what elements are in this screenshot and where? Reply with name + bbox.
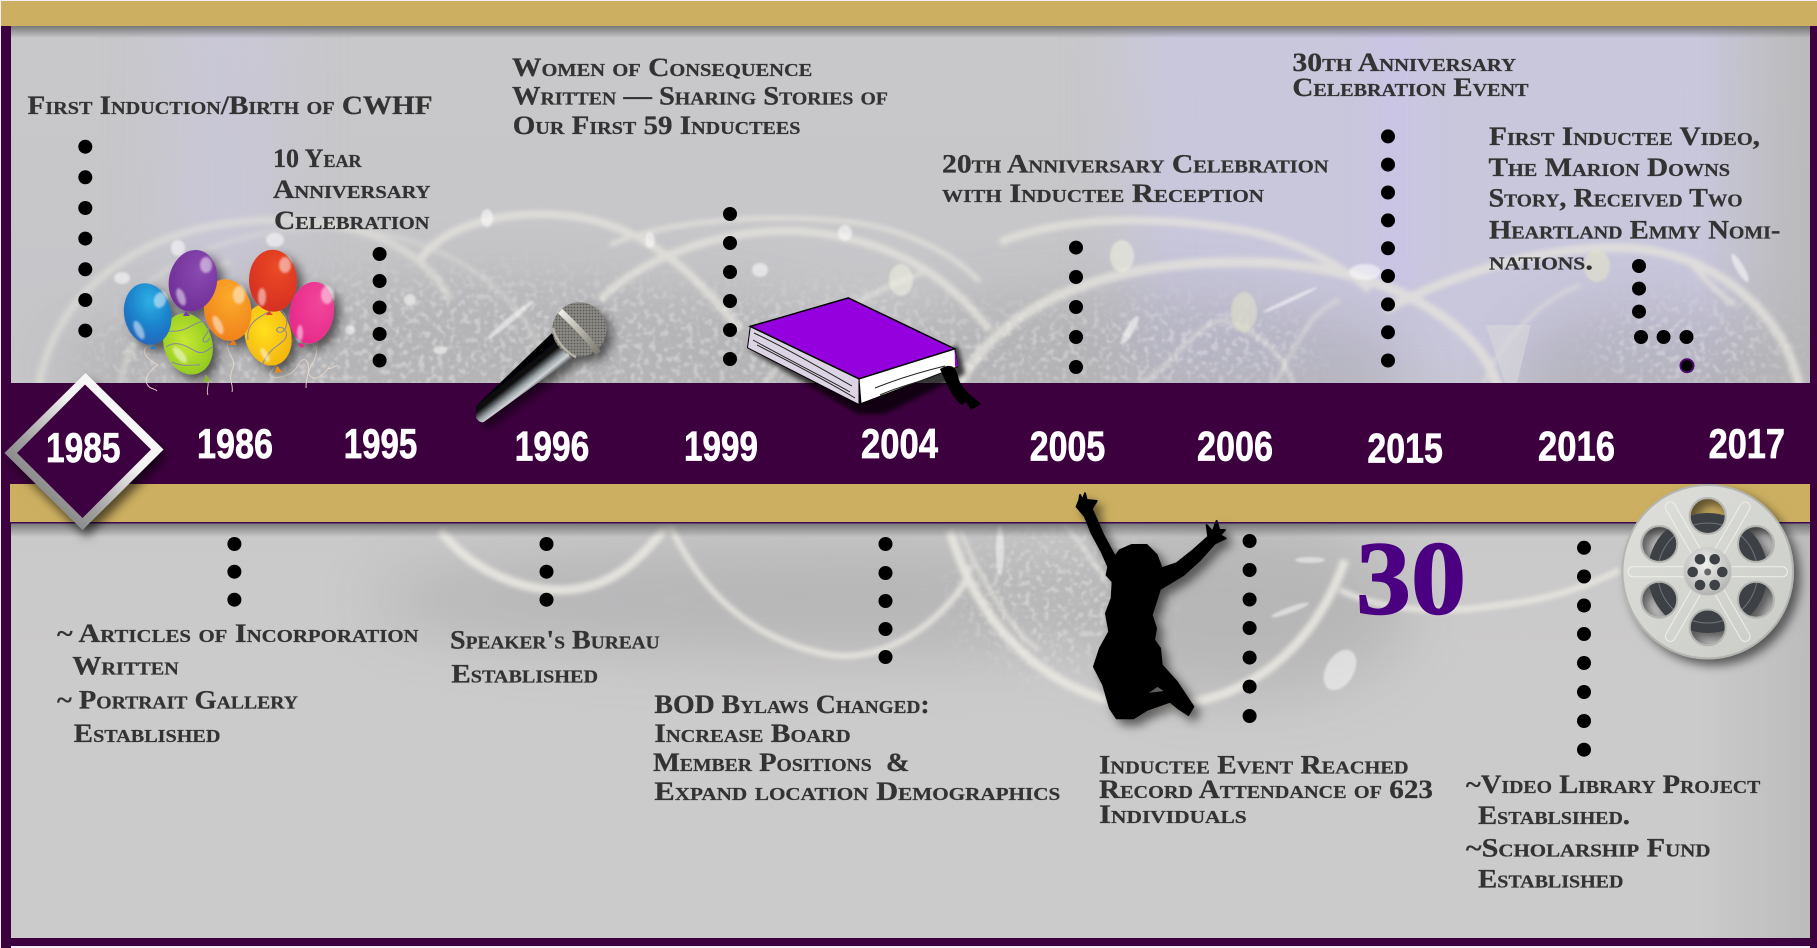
text: 1995 event: 10 Year bbox=[273, 144, 363, 173]
text: 2006 event: Inductee Event Reached bbox=[1099, 750, 1409, 779]
gold lower bar bbox=[10, 484, 1810, 524]
dotted connector 2004 bbox=[878, 537, 892, 664]
text: 1999 event bbox=[512, 53, 888, 140]
text: 2006 event: Record Attendance of 623 bbox=[1099, 775, 1433, 804]
dotted connector 1986 bbox=[227, 537, 241, 607]
text: 1999 event: Written — Sharing Stories of bbox=[512, 82, 888, 111]
year labels: 2005 bbox=[1030, 423, 1105, 470]
year labels: 1996 bbox=[515, 422, 589, 469]
text: 2005 event: 20th Anniversary Celebration bbox=[942, 150, 1329, 178]
text: 2016 events bbox=[1466, 770, 1760, 893]
text: 1996 event: Speaker's Bureau bbox=[450, 626, 660, 655]
dotted connector 1985 bbox=[78, 140, 92, 338]
text: 2004 event bbox=[653, 690, 1060, 806]
text: 2006 event bbox=[1099, 750, 1433, 829]
text: 1986 events bbox=[57, 619, 419, 748]
text: 2016 events: ~Scholarship Fund bbox=[1466, 834, 1710, 863]
text: 2004 event: Increase Board bbox=[654, 719, 851, 748]
year labels: 1995 bbox=[344, 420, 417, 467]
1985 diamond marker bbox=[4, 373, 164, 530]
text: 1999 event: Our First 59 Inductees bbox=[513, 111, 800, 140]
text: 1995 event: Anniversary bbox=[273, 175, 430, 204]
text: 2005 event: with Inductee Reception bbox=[942, 179, 1264, 208]
text: 1999 event: Women of Consequence bbox=[512, 53, 812, 82]
text: 1996 event bbox=[450, 626, 660, 689]
year labels: 2004 bbox=[861, 420, 939, 467]
top gold bar bbox=[1, 1, 1817, 26]
year labels: 1986 bbox=[197, 420, 273, 467]
text: 2015 event: Celebration Event bbox=[1292, 73, 1528, 102]
text: 2004 event: Expand location Demographics bbox=[654, 777, 1060, 806]
text: 2004 event: Member Positions & bbox=[653, 748, 910, 777]
text: 2016 events: Established bbox=[1478, 864, 1623, 893]
text: 2015 event: 30th Anniversary bbox=[1292, 48, 1516, 77]
logo ghost bbox=[1486, 325, 1531, 383]
text: 2015 event bbox=[1292, 48, 1528, 102]
icon: film reel bbox=[1622, 485, 1793, 658]
text: 1996 event: Established bbox=[451, 660, 598, 689]
dotted connector 2005 bbox=[1069, 241, 1083, 374]
text: 2017 event: Story, Received Two bbox=[1488, 184, 1742, 213]
text: 2017 event: Heartland Emmy Nomi- bbox=[1489, 216, 1780, 245]
year labels: 2015 bbox=[1367, 424, 1443, 472]
crystal rings lower bbox=[440, 520, 1620, 706]
text: 1986 events: ~ Portrait Gallery bbox=[57, 686, 298, 715]
year labels bbox=[46, 420, 1785, 472]
icon: purple book bbox=[745, 298, 981, 414]
text: 2017 event: First Inductee Video, bbox=[1489, 122, 1760, 151]
text: 2006 event: Individuals bbox=[1099, 800, 1247, 829]
dotted connector 2006 bbox=[1243, 534, 1257, 723]
icon: microphone bbox=[476, 302, 606, 422]
text: 2017 event: The Marion Downs bbox=[1488, 153, 1730, 182]
dotted connector 1996 bbox=[540, 537, 554, 607]
dotted connector 2016 bbox=[1577, 541, 1591, 757]
year labels: 2017 bbox=[1709, 420, 1785, 467]
text: 1995 event bbox=[273, 144, 430, 235]
text: 2016 events: ~Video Library Project bbox=[1466, 770, 1760, 799]
text: 1995 event: Celebration bbox=[274, 206, 429, 235]
crystal rings upper bbox=[38, 209, 1800, 695]
icon: balloons bbox=[118, 245, 339, 395]
text: 2016 events: Establsihed. bbox=[1478, 801, 1630, 830]
dotted connector 2015 bbox=[1381, 129, 1395, 368]
text: 1985 event: First Induction/Birth of CWHF bbox=[28, 91, 432, 120]
year labels: 2016 bbox=[1538, 423, 1615, 470]
text: 2004 event: BOD Bylaws Changed: bbox=[654, 690, 930, 719]
text: 2005 event bbox=[942, 150, 1329, 208]
year labels: 1985 bbox=[46, 424, 120, 471]
text: 2017 event bbox=[1488, 122, 1780, 276]
text: 1986 events: Established bbox=[74, 719, 220, 748]
text: 1986 events: Written bbox=[72, 652, 179, 681]
text: 1986 events: ~ Articles of Incorporation bbox=[57, 619, 419, 648]
icon: jumping woman silhouette bbox=[1077, 493, 1226, 718]
dotted connector 2017 bbox=[1632, 259, 1694, 372]
big number 30: 30 bbox=[1356, 520, 1466, 636]
purple year band bbox=[10, 383, 1810, 484]
year labels: 2006 bbox=[1197, 423, 1273, 470]
dotted connector 1995 bbox=[373, 247, 387, 368]
dotted connector 1999 bbox=[723, 207, 737, 366]
text: 2017 event: nations. bbox=[1489, 247, 1593, 276]
year labels: 1999 bbox=[684, 423, 758, 470]
